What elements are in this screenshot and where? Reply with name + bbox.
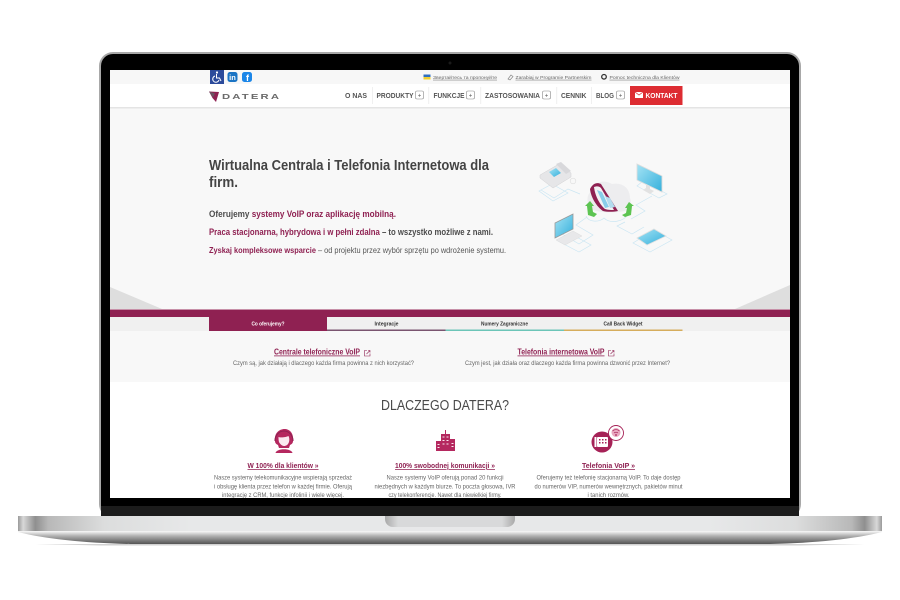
feature: communication: niezbędnych w każdym biurze. To poczta głosowa, IVR <box>374 484 516 490</box>
icon: laptop <box>555 214 582 245</box>
voip links section <box>110 331 790 382</box>
icon: accessibility <box>210 70 224 84</box>
connecting lines <box>539 181 672 252</box>
nav items: ZASTOSOWANIA <box>485 91 541 100</box>
nav items: BLOG <box>596 91 614 100</box>
nav items: + <box>469 94 473 100</box>
nav items: CENNIK <box>561 91 587 100</box>
utility link: technical support: Pomoc techniczna dla Klientów <box>610 75 680 81</box>
laptop lid <box>99 52 801 518</box>
feature: voip telephony: do numerów VIP, numerów wewnętrznych, pakietów minut <box>534 484 683 490</box>
feature: customers: integrację z CRM, funkcje infolinii i wiele więcej. <box>222 493 344 499</box>
feature: communication: czy telekonferencje. Nawet dla niewielkiej firmy. <box>388 493 502 499</box>
icon: facebook: f <box>246 73 250 83</box>
link block: internet telephony <box>465 348 671 367</box>
tab: active: Co oferujemy? <box>252 322 284 328</box>
heading: why datera: DLACZEGO DATERA? <box>381 398 509 414</box>
nav items: + <box>418 94 422 100</box>
nav items: O NAS <box>345 91 367 100</box>
hero section <box>110 108 790 309</box>
icon: green arrows <box>585 201 634 217</box>
contact button: KONTAKT <box>646 91 678 100</box>
hero title <box>209 158 490 191</box>
icon: cloud <box>588 182 631 212</box>
contact button <box>630 86 682 105</box>
icon: monitor <box>637 164 662 194</box>
top utility bar <box>110 70 790 84</box>
hero title: Wirtualna Centrala i Telefonia Internetowa dla <box>209 158 490 174</box>
link block: internet telephony: Telefonia internetowa VoIP <box>518 348 604 356</box>
nav items: + <box>619 94 623 100</box>
feature: voip telephony: Oferujemy też telefonię stacjonarną VoIP. To daje dostęp <box>536 476 681 482</box>
icon: linkedin <box>228 72 238 82</box>
icon: tablet <box>637 229 666 245</box>
utility link: partner programme: Zarabiaj w Programie Partnerskim <box>516 75 592 81</box>
logo: DATERA <box>222 93 279 101</box>
nav items: + <box>545 94 549 100</box>
tab: active <box>209 316 327 331</box>
feature: customers: i obsługę klienta przez telefon w każdej firmie. Oferują <box>214 484 353 490</box>
feature: voip telephony: Telefonia VoIP » <box>582 461 635 470</box>
feature: communication: 100% swobodnej komunikacji » <box>395 461 495 470</box>
icon: voip phone <box>592 426 624 452</box>
illustration: cloud telephony network <box>539 162 672 252</box>
screen bottom bezel <box>101 498 799 506</box>
nav items <box>345 87 624 104</box>
logo <box>209 92 279 102</box>
feature: customers <box>214 429 353 499</box>
utility link: technical support <box>602 74 680 81</box>
hero line 2: Praca stacjonarna, hybrydowa i w pełni zdalna – to wszystko możliwe z nami. <box>209 227 493 237</box>
icon: facebook <box>242 72 252 83</box>
link block: voip exchanges: Czym są, jak działają i dlaczego każda firma powinna z nich korzystać? <box>233 361 415 367</box>
base notch <box>385 516 515 527</box>
icon: desk phone <box>540 162 576 188</box>
utility link: ukraine <box>424 74 497 81</box>
utility link: ukraine: Звертайтесь та пропонуйте <box>433 74 497 81</box>
screen contents <box>110 70 790 499</box>
tab: call back widget <box>564 322 682 331</box>
nav items: PRODUKTY <box>376 91 414 100</box>
feature: voip telephony: i tanich rozmów. <box>588 493 630 499</box>
hero line 1: Oferujemy systemy VoIP oraz aplikację mobilną. <box>209 209 396 219</box>
link block: internet telephony: Czym jest, jak działa oraz dlaczego każda firma powinna dzwonić przez Internet? <box>465 361 671 367</box>
nav items: FUNKCJE <box>434 91 465 100</box>
link block: voip exchanges: Centrale telefoniczne VoIP <box>274 348 360 356</box>
tab: foreign numbers: Numery Zagraniczne <box>481 322 528 328</box>
tab: integrations <box>327 322 446 331</box>
icon: linkedin: in <box>229 73 236 82</box>
icon: headset agent <box>275 429 293 453</box>
feature: customers: Nasze systemy telekomunikacyjne wspierają sprzedaż <box>214 476 352 482</box>
decorative wedges <box>110 287 162 309</box>
hero title: firm. <box>209 175 238 191</box>
hero line 3: Zyskaj kompleksowe wsparcie – od projektu przez wybór sprzętu po wdrożenie systemu. <box>209 245 506 255</box>
tab: foreign numbers <box>446 322 564 331</box>
navigation bar <box>110 84 790 108</box>
laptop base <box>18 516 882 546</box>
tab: call back widget: Call Back Widget <box>604 322 643 328</box>
feature: communication: Nasze systemy VoIP oferują ponad 20 funkcji <box>386 476 504 482</box>
link block: voip exchanges <box>233 348 415 367</box>
feature: communication <box>374 430 516 499</box>
tab: integrations: Integracje <box>374 322 399 328</box>
tab band <box>110 310 790 331</box>
icon: office buildings <box>436 430 455 451</box>
feature: voip telephony <box>534 426 683 499</box>
feature: customers: W 100% dla klientów » <box>248 461 318 470</box>
